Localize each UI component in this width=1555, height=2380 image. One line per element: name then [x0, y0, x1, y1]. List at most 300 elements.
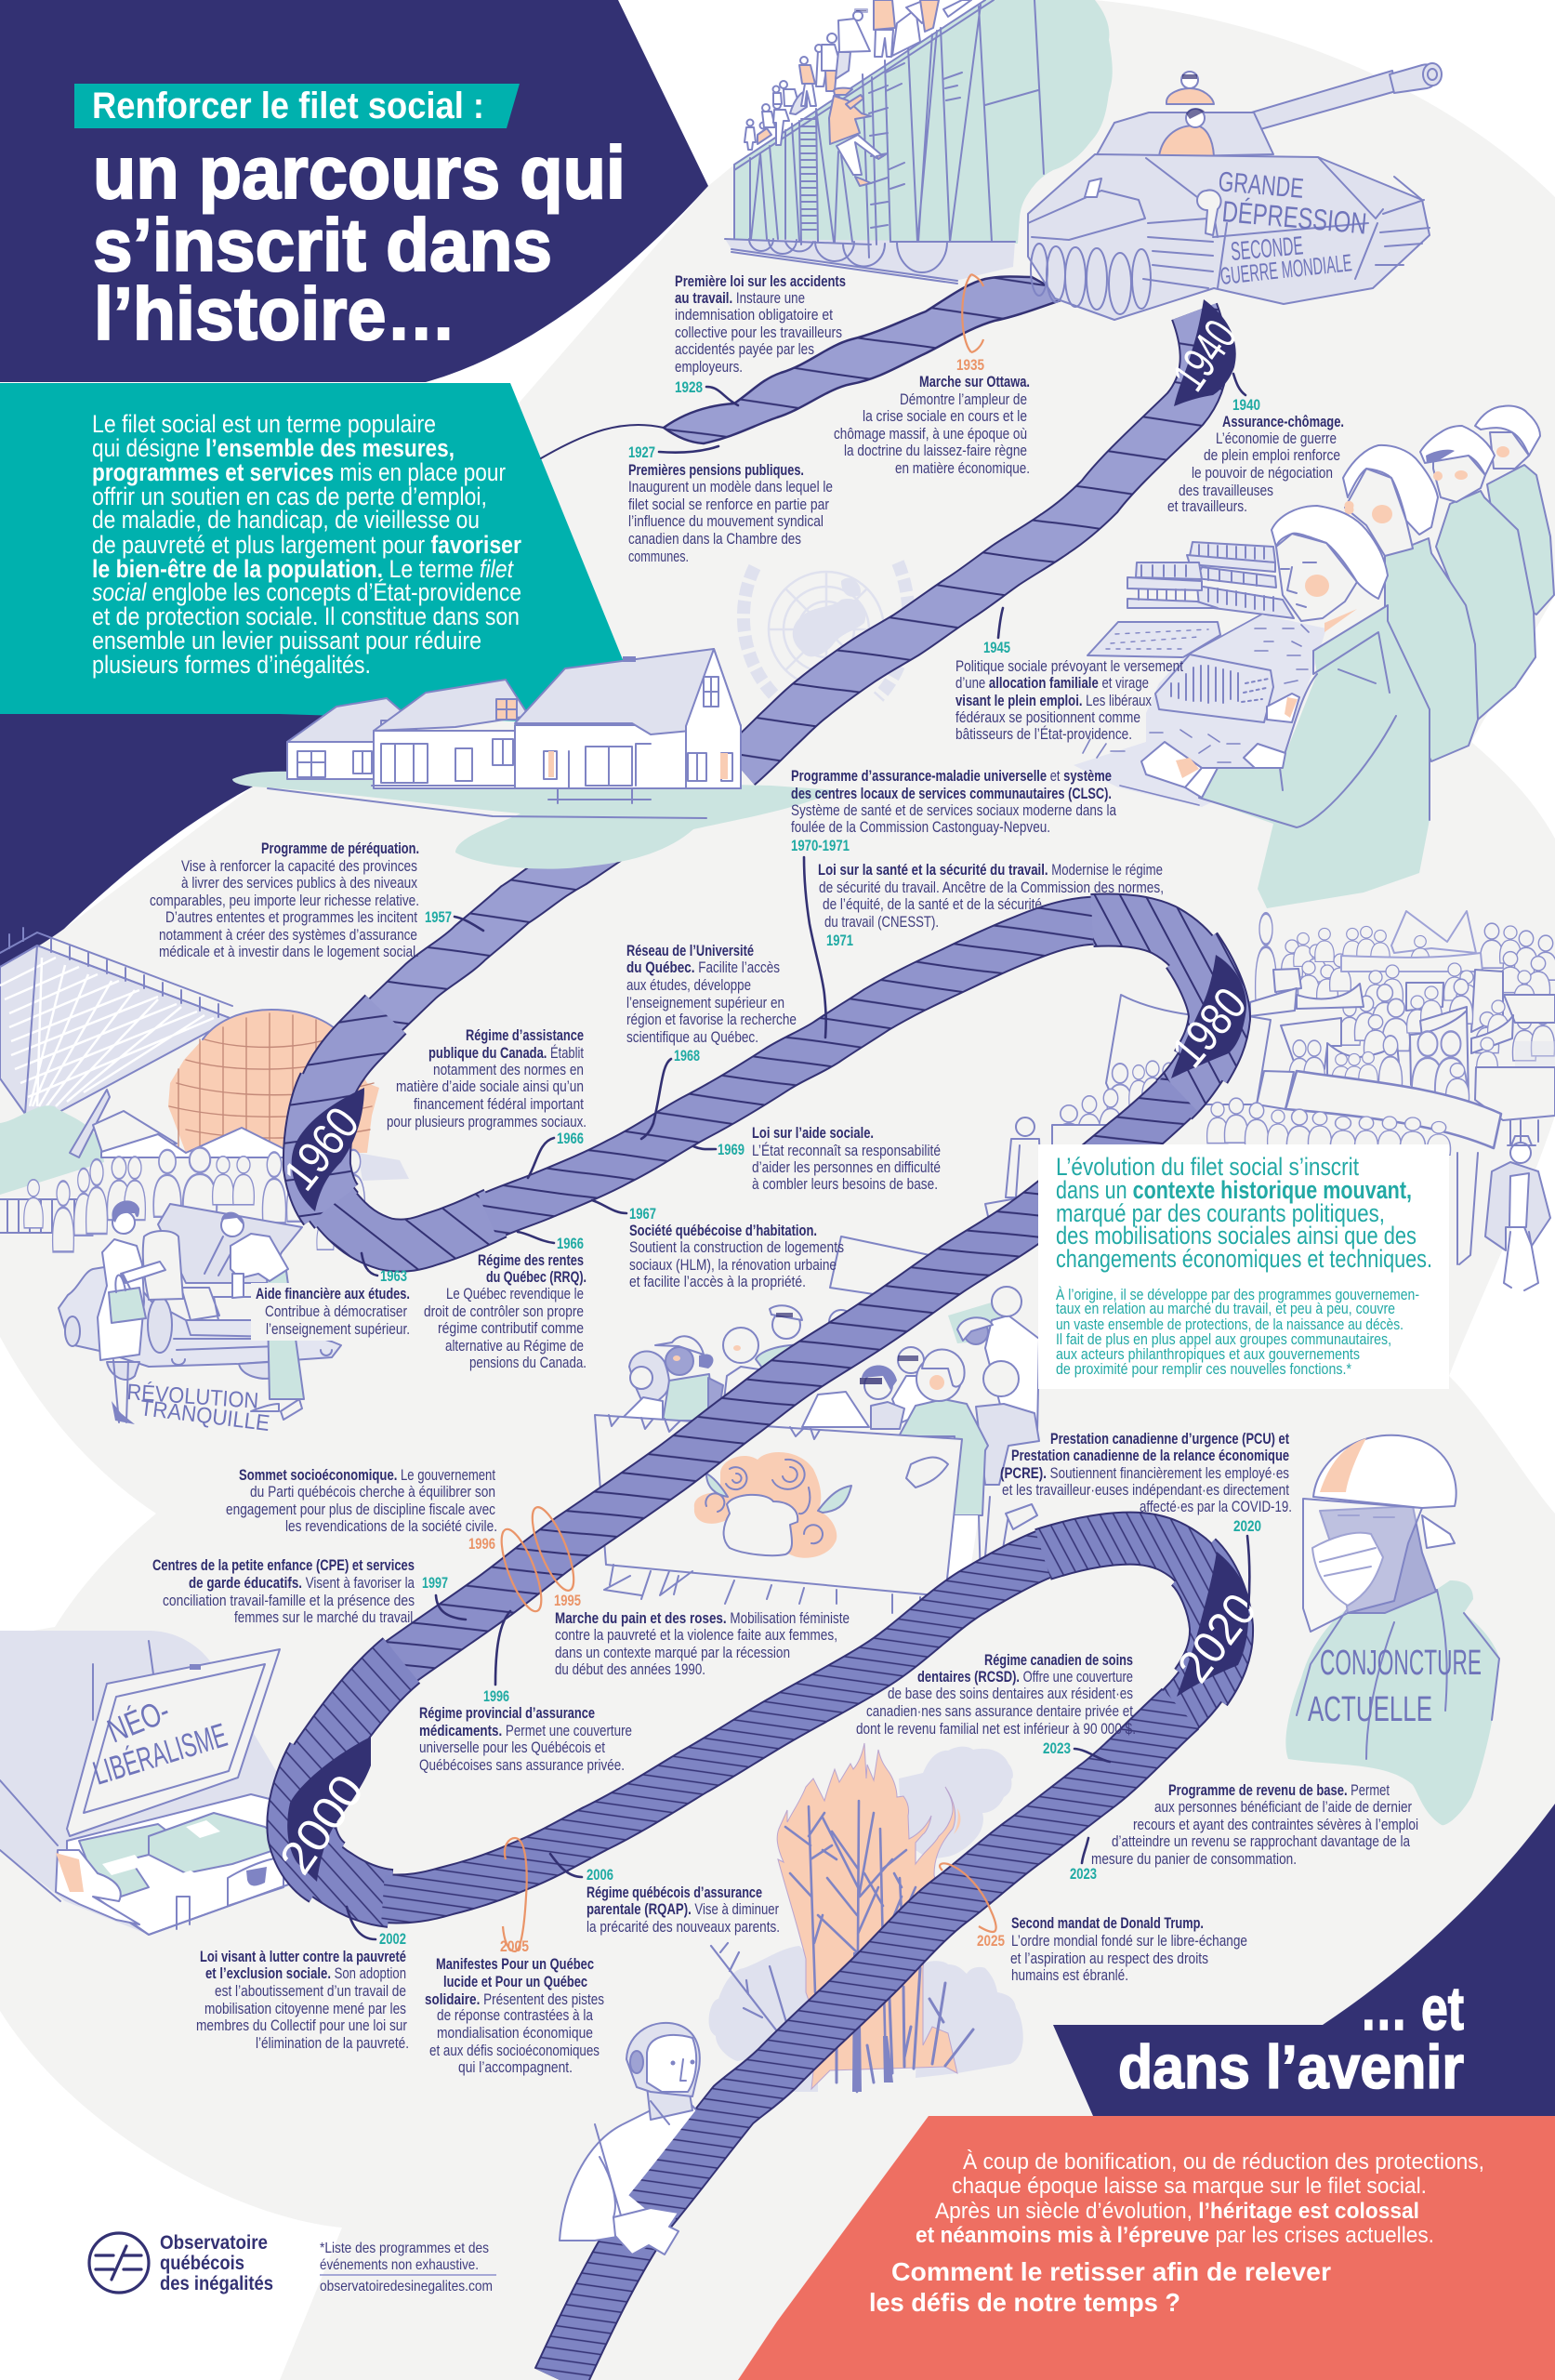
sphere: [168, 1010, 379, 1153]
text: Régime canadien de soins dentaires, 2023: dont le revenu familial net est inférieur à 90 000 $.: [856, 1720, 1136, 1738]
rope strands: [381, 841, 609, 1019]
man: [221, 1212, 304, 1420]
skin: [1320, 1506, 1436, 1613]
closing heading: … et: [1360, 1974, 1464, 2043]
text: Premières pensions publiques, 1927: 1927: [628, 443, 655, 461]
hand: [56, 1850, 139, 1924]
footnote: *Liste des programmes et des: [320, 2241, 489, 2256]
text: Centres de la petite enfance, 1997: Centres de la petite enfance (CPE) et services: [152, 1556, 415, 1574]
text: Manifestes, 2005: de réponse contrastées à la: [437, 2006, 593, 2024]
text: Régime provincial d'assurance médicaments, 1996: universelle pour les Québécois et: [419, 1739, 605, 1756]
text: allocation familiale, 1945: 1945: [983, 639, 1010, 656]
house 1: [287, 698, 402, 779]
orange year rings: [494, 274, 996, 1951]
text: Aide financière aux études, 1963: l’enseignement supérieur.: [266, 1320, 410, 1338]
sign behind the crowd: [830, 1236, 929, 1302]
text: Centres de la petite enfance, 1997: femmes sur le marché du travail.: [234, 1608, 416, 1626]
text: Première loi sur les accidents au travail, 1928: [675, 272, 846, 396]
text: Régime provincial d'assurance médicaments, 1996: Régime provincial d’assurance: [419, 1704, 595, 1722]
woman with long hair: [629, 1352, 669, 1410]
conveyor: [1074, 615, 1326, 807]
text: Programme de péréquation, 1957: Vise à renforcer la capacité des provinces: [181, 857, 417, 875]
burning trees: [785, 1801, 916, 2092]
rope: main rope 1957 to 2025: [299, 841, 1221, 2380]
illustration: demonstrators behind the bread and roses placard: [595, 1236, 1039, 1627]
text: Loi visant à lutter contre la pauvreté, 2002: est l’aboutissement d’un travail de: [215, 1982, 406, 2000]
text: PCU et PCRE, 2020: affecté·es par la COVID-19.: [1140, 1498, 1292, 1515]
main title: s’inscrit dans: [93, 204, 552, 286]
text: Assurance-chômage, 1940: 1940: [1232, 396, 1260, 414]
surgical mask: [1312, 1533, 1383, 1606]
tank lettering: SECONDE: [1230, 231, 1304, 266]
text: Manifestes, 2005: 2005: [500, 1937, 529, 1955]
coral shape: [738, 2116, 1555, 2380]
text: Première loi sur les accidents au travail, 1928: Première loi sur les accidents: [675, 272, 846, 290]
flat tray: [1087, 622, 1220, 657]
badge: 1960: 1960: [273, 1097, 369, 1200]
text: Loi sur l'aide sociale, 1969: Loi sur l’aide sociale.: [752, 1124, 874, 1142]
panel: coral conclusion: [738, 2116, 1555, 2380]
woman with cap: [663, 1374, 714, 1421]
text: Premières pensions publiques, 1927: Inaugurent un modèle dans lequel le: [628, 478, 833, 496]
keypad tray: [1155, 654, 1273, 722]
text: Programme de péréquation, 1957: D’autres ententes et programmes les incitent: [165, 908, 417, 926]
logo wordmark: Observatoire: [160, 2232, 268, 2254]
title banner: [74, 84, 520, 128]
illustration: burning forest and smoke: [709, 1743, 1023, 2092]
intro text block: de pauvreté et plus largement pour favoriser: [92, 531, 521, 559]
handwritten label on coat: ACTUELLE: [1308, 1690, 1432, 1729]
coat: [1285, 1580, 1499, 1825]
intro text block: qui désigne l’ensemble des mesures,: [92, 434, 455, 462]
text: Loi sur l'aide sociale, 1969: [718, 1124, 941, 1193]
text: Programme de péréquation, 1957: [150, 840, 452, 960]
faces below the banners: [1207, 1098, 1538, 1155]
rope: section passing over the robot torso: [649, 2105, 733, 2212]
logo wordmark: des inégalités: [160, 2273, 273, 2294]
car body: [59, 1264, 341, 1367]
people right of the rope: [948, 1302, 1008, 1343]
handwritten label on coat: [1308, 1644, 1482, 1729]
handwritten label on the lid: [88, 1691, 231, 1792]
text: Régime canadien de soins dentaires, 2023: de base des soins dentaires aux résident·es: [888, 1685, 1133, 1702]
text: Régime d'assistance publique du Canada, 1966: matière d’aide sociale ainsi qu’un: [396, 1078, 584, 1095]
intro text block: Le filet social est un terme populaire: [92, 410, 436, 438]
text: Programme de revenu de base, 2023: 2023: [1070, 1865, 1097, 1883]
text: Régime d'assistance publique du Canada, 1966: notamment des normes en: [433, 1061, 584, 1078]
text: Aide financière aux études, 1963: Aide financière aux études.: [256, 1285, 410, 1302]
badge: 1940: [1163, 299, 1246, 406]
roses: [694, 1452, 837, 1558]
text: Second mandat de Donald Trump, 2025: [977, 1914, 1247, 1984]
fair crowd: [0, 1147, 365, 1251]
handwritten caption: Révolution tranquille: [126, 1380, 271, 1436]
text: Régime des rentes du Québec, 1966: du Québec (RRQ).: [486, 1268, 586, 1286]
text: Loi visant à lutter contre la pauvreté, 2002: Loi visant à lutter contre la pauvreté: [200, 1948, 406, 1965]
text: Second mandat de Donald Trump, 2025: 2025: [977, 1932, 1005, 1950]
tank lettering: DÉPRESSION: [1220, 194, 1368, 241]
text: allocation familiale, 1945: Politique sociale prévoyant le versement: [955, 657, 1183, 675]
text: Société québécoise d'habitation, 1967: et facilite l’accès à la propriété.: [629, 1273, 806, 1290]
text: Programme de revenu de base, 2023: mesure du panier de consommation.: [1091, 1850, 1297, 1868]
illustration: health worker (Conjoncture actuelle): [1285, 1435, 1499, 1825]
text: Sommet socioéconomique, 1996: Sommet socioéconomique. Le gouvernement: [239, 1466, 495, 1484]
callout heading: changements économiques et techniques.: [1056, 1245, 1432, 1273]
text: Assurance-chômage, 1940: des travailleuses: [1179, 482, 1273, 499]
text: Réseau de l'Université du Québec, 1968: du Québec. Facilite l’accès: [626, 959, 780, 976]
icon: robot hand gripping rope: [613, 2208, 679, 2254]
text: PCU et PCRE, 2020: (PCRE). Soutiennent financièrement les employé·es: [1000, 1464, 1289, 1482]
text: allocation familiale, 1945: [955, 639, 1183, 743]
text: assurance-maladie et CLSC, 1970-1971: Système de santé et de services sociaux moderne dans la: [791, 801, 1116, 819]
text: Sommet socioéconomique, 1996: engagement pour plus de discipline fiscale avec: [226, 1501, 495, 1518]
text: santé et sécurité du travail, 1971: [818, 861, 1164, 949]
text: Centres de la petite enfance, 1997: [152, 1556, 448, 1626]
badge: 1940: 1940: [1163, 311, 1246, 400]
intro text block: [92, 410, 521, 679]
riders on the roof: [745, 0, 971, 150]
callout body: Il fait de plus en plus appel aux groupes communautaires,: [1056, 1330, 1391, 1348]
main title: l’histoire…: [94, 272, 456, 355]
illustration: briefcase néolibéralisme: [0, 1631, 307, 1935]
text: Marche du pain et des roses, 1995: [554, 1592, 850, 1678]
main title: [93, 131, 626, 355]
hands on placard: [609, 1415, 948, 1488]
conclusion text: [916, 2149, 1484, 2248]
illustration: expo 67 pavilion and geodesic sphere: [0, 928, 409, 1251]
face shield: [1303, 1499, 1422, 1632]
panel: navy closing shape: [1053, 1804, 1555, 2116]
crew: [1166, 88, 1214, 104]
footnote: [320, 2241, 496, 2294]
text: RQAP, 2006: parentale (RQAP). Vise à diminuer: [586, 1900, 779, 1918]
rope outline: [299, 841, 1221, 2380]
text: santé et sécurité du travail, 1971: du travail (CNESST).: [824, 913, 939, 931]
text: Société québécoise d'habitation, 1967: Société québécoise d’habitation.: [629, 1222, 817, 1239]
text: Réseau de l'Université du Québec, 1968: 1968: [674, 1047, 700, 1064]
smoke clouds: [899, 1747, 1013, 1859]
text: Loi sur l'aide sociale, 1969: 1969: [718, 1141, 745, 1158]
text: Premières pensions publiques, 1927: l’influence du mouvement syndical: [628, 512, 824, 530]
text: Première loi sur les accidents au travail, 1928: accidentés payée par les: [675, 340, 814, 358]
flames: [777, 1743, 957, 2089]
text: Régime provincial d'assurance médicaments, 1996: [419, 1687, 632, 1774]
text: Réseau de l'Université du Québec, 1968: aux études, développe: [626, 976, 751, 994]
text: Première loi sur les accidents au travail, 1928: indemnisation obligatoire et: [675, 306, 833, 324]
hull: [1028, 154, 1430, 320]
text: PCU et PCRE, 2020: [1000, 1430, 1292, 1535]
second worker: [1343, 445, 1478, 761]
text: assurance-maladie et CLSC, 1970-1971: Programme d’assurance-maladie universelle et système: [791, 767, 1112, 785]
text: PCU et PCRE, 2020: Prestation canadienne de la relance économique: [1011, 1447, 1289, 1464]
text: Second mandat de Donald Trump, 2025: L’ordre mondial fondé sur le libre-échange: [1011, 1932, 1247, 1950]
luggage in trunk: [181, 1288, 260, 1320]
house 2: [372, 680, 530, 788]
open trunk lid: [158, 1204, 302, 1283]
text: Marche du pain et des roses, 1995: du début des années 1990.: [555, 1660, 705, 1678]
text: Second mandat de Donald Trump, 2025: et l’aspiration au respect des droits: [1010, 1950, 1208, 1967]
text: Marche sur Ottawa, 1935: chômage massif, à une époque où: [834, 425, 1027, 443]
illustration: tank Grande Dépression / Seconde Guerre mondiale: [1028, 63, 1442, 320]
callout body: aux acteurs philanthropiques et aux gouvernements: [1056, 1345, 1360, 1363]
text: Société québécoise d'habitation, 1967: [629, 1205, 844, 1290]
illustration: protest crowd 1980s: [985, 911, 1555, 1290]
panel: navy header shape: [0, 0, 708, 382]
conclusion text: chaque époque laisse sa marque sur le filet social.: [952, 2174, 1427, 2199]
text: Programme de revenu de base, 2023: recours et ayant des contraintes sévères à l’emploi: [1133, 1816, 1418, 1833]
text: Second mandat de Donald Trump, 2025: Second mandat de Donald Trump.: [1011, 1914, 1204, 1932]
text: Marche sur Ottawa, 1935: la crise sociale en cours et le: [863, 407, 1027, 425]
text: Programme de revenu de base, 2023: d’atteindre un revenu se rapprochant davantage de la: [1112, 1832, 1410, 1850]
conclusion text: À coup de bonification, ou de réduction des protections,: [963, 2149, 1484, 2175]
illustration: UN emblem: [744, 562, 908, 697]
text: Régime canadien de soins dentaires, 2023: Régime canadien de soins: [984, 1651, 1133, 1669]
badge: 2020: 2020: [1167, 1584, 1267, 1692]
footnote: observatoiredesinegalites.com: [320, 2279, 493, 2294]
handwritten caption: Révolution tranquille: TRANQUILLE: [138, 1395, 271, 1436]
gun barrel: [1208, 71, 1396, 141]
text: Sommet socioéconomique, 1996: les revendications de la société civile.: [285, 1517, 497, 1535]
tank lettering: [1217, 166, 1368, 290]
text: Société québécoise d'habitation, 1967: Soutient la construction de logements: [629, 1238, 844, 1256]
text: Manifestes, 2005: Manifestes Pour un Québec: [436, 1955, 594, 1973]
text: Régime d'assistance publique du Canada, 1966: 1966: [557, 1130, 584, 1147]
text: Régime provincial d'assurance médicaments, 1996: 1996: [483, 1687, 509, 1705]
text: Manifestes, 2005: lucide et Pour un Québec: [443, 1973, 587, 1990]
text: Réseau de l'Université du Québec, 1968: l’enseignement supérieur en: [626, 994, 784, 1012]
callout heading: L’évolution du filet social s’inscrit: [1056, 1153, 1359, 1181]
callout background: [1038, 1144, 1449, 1389]
conclusion question: Comment le retisser afin de relever: [891, 2257, 1331, 2286]
text: Loi sur l'aide sociale, 1969: L’État reconnaît sa responsabilité: [752, 1142, 941, 1159]
callout body: un vaste ensemble de protections, de la naissance au décès.: [1056, 1316, 1403, 1333]
fourth worker: [1475, 406, 1554, 615]
bread: [724, 1495, 797, 1555]
panel: navy lower-left shape: [0, 707, 483, 967]
banner text: Renforcer le filet social :: [92, 86, 484, 126]
intro text block: le bien-être de la population. Le terme filet: [92, 555, 514, 583]
logo wordmark: [160, 2232, 273, 2294]
text: Réseau de l'Université du Québec, 1968: [626, 942, 797, 1064]
text: Régime provincial d'assurance médicaments, 1996: Québécoises sans assurance privée.: [419, 1756, 625, 1774]
text: Programme de péréquation, 1957: comparables, peu importe leur richesse relative.: [150, 892, 419, 909]
third worker: [1420, 426, 1535, 720]
text: Marche sur Ottawa, 1935: en matière économique.: [895, 459, 1030, 477]
conclusion question: les défis de notre temps ?: [869, 2288, 1180, 2317]
callout body: À l’origine, il se développe par des programmes gouvernemen-: [1056, 1286, 1419, 1303]
badge: 1980: 1980: [1162, 978, 1257, 1077]
intro text block: et de protection sociale. Il constitue dans son: [92, 602, 520, 630]
text: Marche sur Ottawa, 1935: Démontre l’ampleur de: [900, 390, 1027, 408]
text: Premières pensions publiques, 1927: filet social se renforce en partie par: [628, 496, 829, 513]
text: Régime canadien de soins dentaires, 2023: 2023: [1043, 1739, 1071, 1757]
text: RQAP, 2006: 2006: [586, 1866, 613, 1884]
logo mark: [89, 2233, 149, 2293]
panel: teal introduction: [0, 383, 651, 725]
lid: [67, 1649, 280, 1836]
text: Régime des rentes du Québec, 1966: alternative au Régime de: [445, 1337, 584, 1355]
middle crowd: [1339, 1000, 1360, 1045]
text: Assurance-chômage, 1940: de plein emploi renforce: [1204, 446, 1340, 464]
back crowd and flag: [1391, 911, 1476, 953]
text: Assurance-chômage, 1940: et travailleurs.: [1167, 497, 1247, 515]
text: Marche sur Ottawa, 1935: 1935: [956, 356, 984, 374]
main banners: [1475, 1067, 1555, 1120]
text: Régime canadien de soins dentaires, 2023: dentaires (RCSD). Offre une couverture: [917, 1668, 1133, 1686]
text: Marche sur Ottawa, 1935: [834, 356, 1030, 477]
leader lines for timeline years: [347, 374, 1249, 1939]
text: Premières pensions publiques, 1927: canadien dans la Chambre des: [628, 530, 801, 548]
text: Marche du pain et des roses, 1995: Marche du pain et des roses. Mobilisation féministe: [555, 1609, 850, 1627]
climbing man: [829, 88, 886, 186]
text: PCU et PCRE, 2020: et les travailleur·euses indépendant·es directement: [1002, 1481, 1289, 1499]
text: assurance-maladie et CLSC, 1970-1971: 1970-1971: [791, 837, 850, 854]
text: Programme de revenu de base, 2023: [1070, 1781, 1418, 1883]
man with scarf left of panel: [985, 1089, 1123, 1236]
text: Programme de péréquation, 1957: à livrer des services publics à des niveaux: [181, 874, 417, 892]
handwritten caption: Révolution tranquille: RÉVOLUTION: [126, 1380, 259, 1414]
tank lettering: GUERRE MONDIALE: [1219, 248, 1353, 290]
caption panel behind the 1963 text: [251, 1283, 415, 1341]
house 3: [515, 649, 741, 803]
text: Manifestes, 2005: [425, 1937, 604, 2076]
tents: [101, 1128, 307, 1157]
intro text block: programmes et services mis en place pour: [92, 458, 506, 486]
text: santé et sécurité du travail, 1971: de l’équité, de la santé et de la sécurité: [823, 895, 1042, 913]
text: Marche sur Ottawa, 1935: Marche sur Ottawa.: [919, 373, 1030, 390]
text: Loi visant à lutter contre la pauvreté, 2002: 2002: [379, 1930, 406, 1948]
trays of pastries: [1074, 542, 1326, 807]
callout heading: [1056, 1153, 1432, 1273]
text: assurance-maladie et CLSC, 1970-1971: des centres locaux de services communautaires (CLSC).: [791, 785, 1112, 802]
text: PCU et PCRE, 2020: Prestation canadienne d’urgence (PCU) et: [1050, 1430, 1289, 1448]
text: Programme de péréquation, 1957: Programme de péréquation.: [261, 840, 419, 857]
text: Société québécoise d'habitation, 1967: sociaux (HLM), la rénovation urbaine: [629, 1256, 837, 1274]
conclusion question: [869, 2257, 1331, 2317]
banner shape: [74, 84, 520, 128]
conclusion text: Après un siècle d’évolution, l’héritage est colossal: [935, 2199, 1419, 2224]
cap: [1313, 1435, 1456, 1508]
tank lettering: GRANDE: [1217, 166, 1305, 205]
text: allocation familiale, 1945: visant le plein emploi. Les libéraux: [955, 692, 1152, 709]
callout heading: des mobilisations sociales ainsi que des: [1056, 1222, 1417, 1250]
text: Régime d'assistance publique du Canada, 1966: financement fédéral important: [414, 1095, 584, 1113]
placard: [595, 1415, 962, 1627]
text: Marche du pain et des roses, 1995: 1995: [554, 1592, 581, 1609]
intro text block: offrir un soutien en cas de perte d’emploi,: [92, 483, 487, 510]
text: Marche du pain et des roses, 1995: contre la pauvreté et la violence faite aux femmes,: [555, 1626, 837, 1644]
text: Première loi sur les accidents au travail, 1928: employeurs.: [675, 358, 743, 376]
text: Régime des rentes du Québec, 1966: pensions du Canada.: [469, 1354, 586, 1371]
text: Premières pensions publiques, 1927: Premières pensions publiques.: [628, 461, 804, 479]
text: RQAP, 2006: [586, 1866, 780, 1936]
person with curly hair: [722, 1367, 778, 1416]
text: Assurance-chômage, 1940: Assurance-chômage.: [1222, 413, 1344, 430]
text: Régime d'assistance publique du Canada, 1966: publique du Canada. Établit: [428, 1044, 584, 1062]
text: Loi visant à lutter contre la pauvreté, 2002: membres du Collectif pour une loi sur: [196, 2016, 407, 2034]
profile man: [829, 1310, 853, 1334]
conclusion text: et néanmoins mis à l’épreuve par les crises actuelles.: [916, 2223, 1434, 2248]
text: Loi visant à lutter contre la pauvreté, 2002: [196, 1930, 409, 2052]
text: Régime canadien de soins dentaires, 2023: canadien·nes sans assurance dentaire privée et: [866, 1702, 1133, 1720]
text: Programme de péréquation, 1957: notamment à créer des systèmes d’assurance: [159, 926, 417, 944]
closing heading: dans l’avenir: [1118, 2032, 1464, 2101]
text: Manifestes, 2005: et aux défis socioéconomiques: [429, 2042, 600, 2059]
logo: Observatoire québécois des inégalités: [89, 2232, 273, 2294]
illustration: 1960s family and car (Révolution tranquille): [59, 1200, 415, 1436]
text: Programme de péréquation, 1957: médicale et à investir dans le logement social.: [159, 943, 419, 960]
text: assurance-maladie et CLSC, 1970-1971: [791, 767, 1116, 854]
handwritten label on the lid: LIBÉRALISME: [88, 1715, 231, 1792]
text: Réseau de l'Université du Québec, 1968: région et favorise la recherche: [626, 1011, 797, 1028]
text: Régime des rentes du Québec, 1966: droit de contrôler son propre: [424, 1302, 584, 1320]
text: Premières pensions publiques, 1927: [628, 443, 833, 565]
text: Marche du pain et des roses, 1995: dans un contexte marqué par la récession: [555, 1644, 790, 1661]
text: Marche sur Ottawa, 1935: la doctrine du laissez-faire règne: [844, 442, 1027, 459]
illustration: postwar houses: [232, 649, 837, 869]
closing heading: [1118, 1974, 1464, 2101]
woman: [98, 1200, 183, 1424]
text: Second mandat de Donald Trump, 2025: humains est ébranlé.: [1011, 1966, 1128, 1984]
callout body: [1056, 1286, 1419, 1378]
text: Loi sur l'aide sociale, 1969: d’aider les personnes en difficulté: [752, 1158, 941, 1176]
front worker: [1141, 506, 1430, 908]
text: RQAP, 2006: Régime québécois d’assurance: [586, 1884, 762, 1901]
text: allocation familiale, 1945: d’une allocation familiale et virage: [955, 674, 1149, 692]
rope: 1940-1945 strand: [739, 311, 1204, 767]
text: Centres de la petite enfance, 1997: 1997: [422, 1574, 448, 1592]
text: Programme de revenu de base, 2023: Programme de revenu de base. Permet: [1168, 1781, 1390, 1799]
text: Société québécoise d'habitation, 1967: 1967: [629, 1205, 656, 1223]
text: Assurance-chômage, 1940: [1167, 396, 1344, 515]
text: Première loi sur les accidents au travail, 1928: collective pour les travailleurs: [675, 324, 842, 341]
intro text block: ensemble un levier puissant pour réduire: [92, 627, 481, 654]
callout heading: dans un contexte historique mouvant,: [1056, 1176, 1412, 1204]
text: Sommet socioéconomique, 1996: [226, 1466, 497, 1553]
text: PCU et PCRE, 2020: 2020: [1233, 1517, 1261, 1535]
text: Régime d'assistance publique du Canada, 1966: Régime d’assistance: [466, 1026, 584, 1044]
text: Assurance-chômage, 1940: L’économie de guerre: [1216, 430, 1337, 447]
text: Loi sur l'aide sociale, 1969: à combler leurs besoins de base.: [752, 1175, 938, 1193]
intro text block: de maladie, de handicap, de vieillesse ou: [92, 506, 480, 534]
text: santé et sécurité du travail, 1971: Loi sur la santé et la sécurité du travail. Modernise le régime: [818, 861, 1163, 879]
text: allocation familiale, 1945: fédéraux se positionnent comme: [955, 708, 1140, 726]
text: Régime provincial d'assurance médicaments, 1996: médicaments. Permet une couverture: [419, 1722, 632, 1739]
footnote: événements non exhaustive.: [320, 2257, 479, 2273]
text: Première loi sur les accidents au travail, 1928: 1928: [675, 378, 703, 396]
text: Aide financière aux études, 1963: [256, 1267, 410, 1338]
text: Régime des rentes du Québec, 1966: 1966: [557, 1235, 584, 1252]
text: Régime d'assistance publique du Canada, 1966: pour plusieurs programmes sociaux.: [387, 1113, 586, 1130]
text: Loi visant à lutter contre la pauvreté, 2002: mobilisation citoyenne mené par les: [204, 2000, 406, 2017]
text: Régime des rentes du Québec, 1966: Régime des rentes: [478, 1251, 584, 1269]
text: allocation familiale, 1945: bâtisseurs de l’État-providence.: [955, 725, 1132, 743]
panel: evolution callout: [1038, 1144, 1449, 1389]
text: RQAP, 2006: la précarité des nouveaux parents.: [586, 1918, 780, 1936]
text: Réseau de l'Université du Québec, 1968: scientifique au Québec.: [626, 1028, 758, 1046]
callout body: de proximité pour remplir ces nouvelles fonctions.*: [1056, 1360, 1351, 1378]
logo wordmark: québécois: [160, 2253, 244, 2274]
main title: un parcours qui: [93, 131, 626, 214]
handwritten label on the lid: NÉO-: [102, 1691, 175, 1750]
text: Sommet socioéconomique, 1996: 1996: [468, 1535, 495, 1553]
text: Programme de revenu de base, 2023: aux personnes bénéficiant de l’aide de dernier: [1154, 1798, 1412, 1816]
text: Assurance-chômage, 1940: le pouvoir de négociation: [1192, 464, 1333, 482]
text: Réseau de l'Université du Québec, 1968: Réseau de l’Université: [626, 942, 754, 959]
text: Centres de la petite enfance, 1997: de garde éducatifs. Visent à favoriser la: [189, 1574, 415, 1592]
turret: [1095, 112, 1273, 158]
callout body: taux en relation au marché du travail, et peu à peu, couvre: [1056, 1300, 1395, 1317]
